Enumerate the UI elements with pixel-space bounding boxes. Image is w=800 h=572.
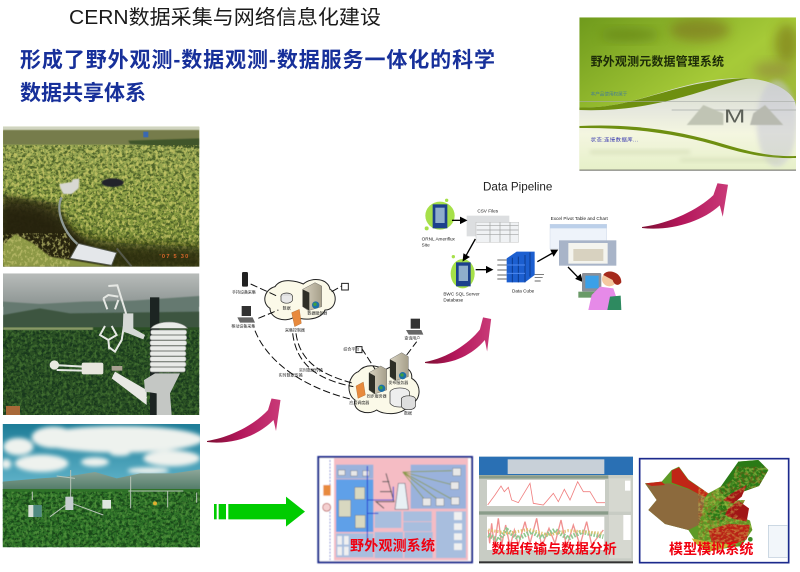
label: model simulation system: 模型模拟系统: [669, 541, 753, 557]
data cube: [497, 252, 544, 282]
label: data transmission and analysis: 数据传输与数据分析: [492, 540, 617, 556]
panel: field observation system: [318, 457, 472, 562]
network labels: 数据服务器: [307, 310, 327, 316]
photo: weather instruments over forest: [3, 273, 199, 415]
CSV sheets: [467, 216, 519, 242]
data pipeline diagram: [422, 180, 621, 310]
network labels: 应用调度器: [349, 399, 369, 405]
label: field observation system: 野外观测系统: [350, 538, 435, 554]
heading: [20, 48, 495, 105]
panel: metadata system splash screen: 本产品使用权属于: [591, 91, 628, 98]
servers: [281, 283, 415, 410]
photo: wheat field: [0, 127, 207, 273]
pipeline labels: Site: [422, 242, 430, 247]
dashed links: [251, 284, 417, 399]
panel: model simulation system: [640, 459, 789, 563]
heading: 形成了野外观测-数据观测-数据服务一体化的科学: [20, 48, 495, 72]
arrow: pipeline to metadata system: [642, 183, 728, 229]
network labels: 实时数据传输: [299, 367, 323, 373]
pipeline heading: Data Pipeline: [483, 180, 552, 193]
network labels: 实时数据传输: [279, 372, 303, 378]
pipeline arrows: [452, 218, 582, 281]
pipeline labels: CSV Files: [477, 208, 499, 213]
panel: metadata system splash screen: [579, 17, 798, 171]
network labels: 数据: [283, 304, 291, 310]
pipeline labels: BWC SQL Server: [443, 291, 480, 296]
arrow: green flow arrow: [214, 497, 305, 527]
pipeline labels: ORNL Ameriflux: [422, 236, 456, 241]
panel: metadata system splash screen: M: [724, 106, 745, 127]
network labels: 手持设备采集: [232, 288, 256, 294]
network labels: 综合平台: [343, 346, 359, 352]
network labels: 发布服务器: [388, 379, 408, 385]
arrow: network to pipeline: [425, 317, 491, 364]
site servers: [433, 204, 471, 286]
pipeline labels: [422, 208, 608, 302]
pipeline labels: Data Cube: [512, 289, 535, 294]
pipeline labels: Excel Pivot Table and Chart: [551, 216, 608, 221]
network labels: 采集控制器: [285, 326, 305, 332]
network labels: 查询用户: [404, 334, 420, 340]
network labels: 移动设备采集: [231, 323, 255, 329]
devices: [237, 272, 423, 353]
panel: metadata system splash screen: 野外观测元数据管理系统: [591, 53, 724, 68]
network labels: 同步服务器: [367, 393, 387, 399]
map of China: [645, 460, 788, 557]
panel: metadata system splash screen: 状态:连接数据库...: [591, 135, 638, 143]
cloud: collection station: [265, 280, 335, 320]
photo: wheat field: '07 5 30: [159, 254, 188, 260]
pipeline labels: Database: [443, 297, 464, 302]
pivot screens: [550, 224, 616, 266]
arrow: field photos to network: [207, 398, 280, 443]
title: CERN数据采集与网络信息化建设: [69, 6, 381, 29]
site blobs: [425, 199, 475, 288]
network labels: [231, 288, 420, 415]
network diagram: [231, 272, 423, 415]
panel: data transmission and analysis: [479, 457, 633, 563]
heading: 数据共享体系: [20, 82, 146, 105]
photo: field station under cloudy sky: [1, 424, 203, 547]
network labels: 数据: [404, 409, 412, 415]
analyst at computer: [578, 272, 621, 310]
cloud: data center: [349, 366, 419, 414]
